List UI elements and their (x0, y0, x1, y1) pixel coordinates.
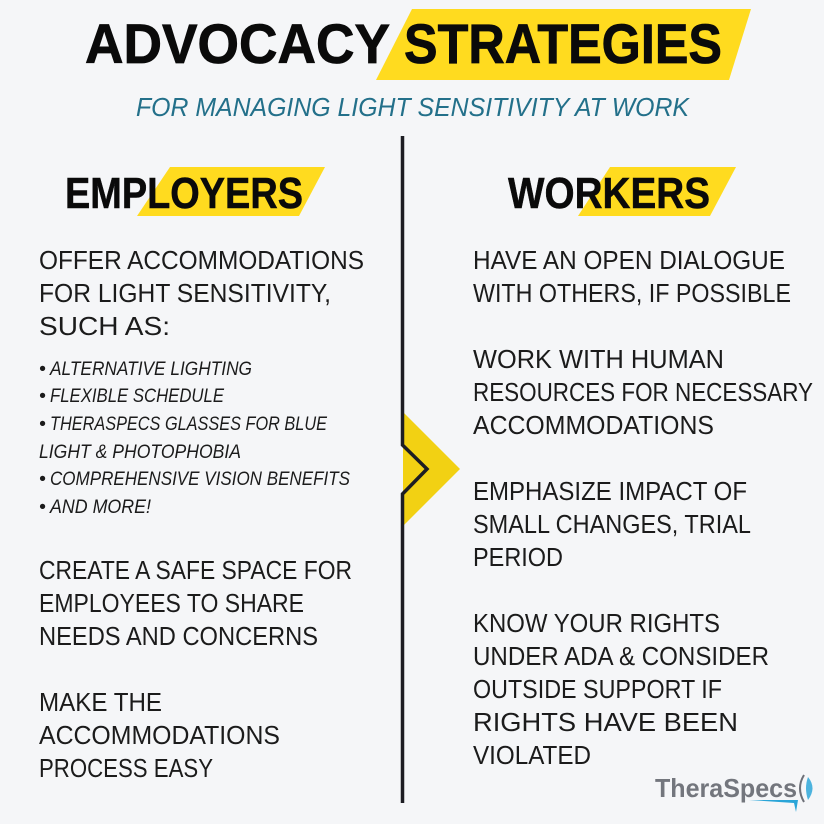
know your rights text: UNDER ADA & CONSIDER (473, 641, 769, 671)
human resources text (473, 344, 813, 440)
logo swoosh (749, 800, 798, 812)
panel: employers (39, 167, 364, 783)
title highlight (376, 9, 751, 80)
title (85, 9, 751, 80)
center divider with chevron (402, 136, 460, 803)
icon: eye (800, 775, 804, 802)
accommodations list: THERASPECS GLASSES FOR BLUE (50, 413, 328, 435)
small changes text: SMALL CHANGES, TRIAL (473, 509, 751, 539)
know your rights text: KNOW YOUR RIGHTS (473, 608, 720, 638)
yellow chevron (403, 412, 460, 526)
safe space text: CREATE A SAFE SPACE FOR (39, 555, 352, 585)
small changes text (473, 476, 751, 572)
accommodations list: LIGHT & PHOTOPHOBIA (39, 441, 241, 463)
human resources text: ACCOMMODATIONS (473, 410, 714, 440)
accommodations list: COMPREHENSIVE VISION BENEFITS (50, 468, 350, 490)
accommodations list: • (39, 496, 46, 518)
accommodations list: ALTERNATIVE LIGHTING (49, 358, 252, 380)
logo: TheraSpecs (655, 773, 812, 812)
know your rights text (473, 608, 769, 770)
title: STRATEGIES (404, 12, 722, 75)
open dialogue text: WITH OTHERS, IF POSSIBLE (473, 278, 791, 308)
accommodations list: • (39, 358, 46, 380)
easy process text (39, 687, 280, 783)
intro text: SUCH AS: (39, 311, 170, 341)
subtitle: FOR MANAGING LIGHT SENSITIVITY AT WORK (136, 92, 691, 122)
intro text (39, 245, 364, 341)
open dialogue text: HAVE AN OPEN DIALOGUE (473, 245, 785, 275)
accommodations list: • (39, 468, 46, 490)
know your rights text: VIOLATED (473, 740, 591, 770)
human resources text: WORK WITH HUMAN (473, 344, 724, 374)
accommodations list (39, 358, 350, 518)
intro text: FOR LIGHT SENSITIVITY, (39, 278, 331, 308)
panel: workers (473, 167, 813, 770)
open dialogue text (473, 245, 791, 308)
logo wordmark: TheraSpecs (655, 773, 797, 803)
accommodations list: AND MORE! (49, 496, 152, 518)
safe space text: EMPLOYEES TO SHARE (39, 588, 304, 618)
know your rights text: OUTSIDE SUPPORT IF (473, 674, 722, 704)
small changes text: EMPHASIZE IMPACT OF (473, 476, 747, 506)
safe space text: NEEDS AND CONCERNS (39, 621, 318, 651)
workers heading: WORKERS (508, 169, 710, 218)
know your rights text: RIGHTS HAVE BEEN (473, 707, 738, 737)
employers heading: EMPLOYERS (65, 169, 303, 218)
accommodations list: FLEXIBLE SCHEDULE (50, 385, 225, 407)
intro text: OFFER ACCOMMODATIONS (39, 245, 364, 275)
title text: ADVOCACY (85, 12, 390, 75)
accommodations list: • (39, 413, 46, 435)
easy process text: ACCOMMODATIONS (39, 720, 280, 750)
safe space text (39, 555, 352, 651)
divider line (402, 136, 427, 803)
easy process text: PROCESS EASY (39, 753, 213, 783)
small changes text: PERIOD (473, 542, 563, 572)
easy process text: MAKE THE (39, 687, 162, 717)
accommodations list: • (39, 385, 46, 407)
